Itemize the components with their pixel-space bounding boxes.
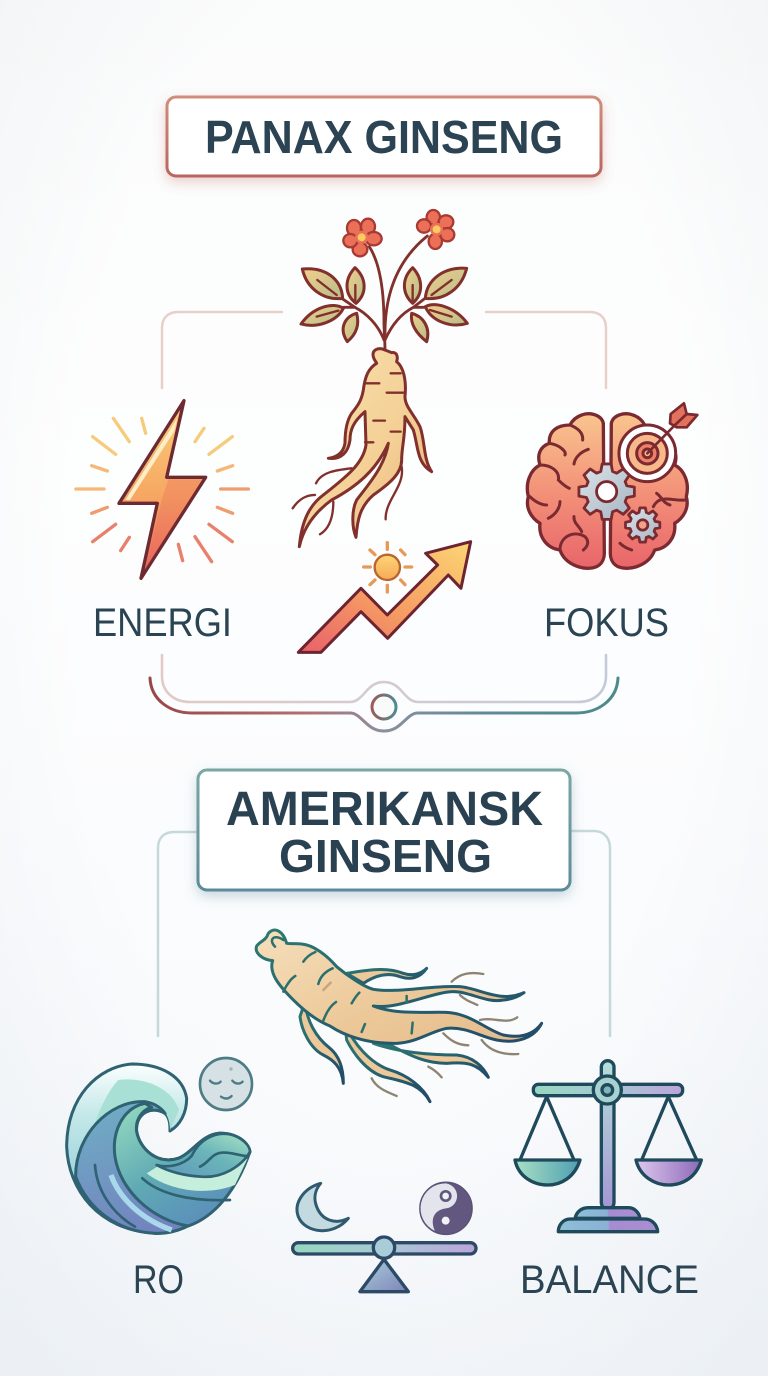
- label: BALANCE: BALANCE: [520, 1258, 699, 1302]
- crescent moon: [297, 1183, 348, 1231]
- bolt: [119, 401, 206, 578]
- body markings: [272, 937, 413, 1033]
- root markings: [365, 373, 403, 442]
- left pan: [515, 1160, 580, 1185]
- leaf veins: [317, 280, 452, 317]
- wave back band: [76, 1102, 250, 1233]
- right pan: [636, 1160, 701, 1185]
- beam: [533, 1084, 683, 1096]
- wave crest colour: [95, 1079, 179, 1130]
- icon: American ginseng root: [256, 930, 542, 1102]
- sun: [364, 543, 412, 592]
- connector lines: American top: [158, 831, 610, 1036]
- wave outline: [67, 1064, 250, 1233]
- root body: [299, 349, 432, 547]
- target: [619, 425, 676, 482]
- icon: wave with calm moon face: [67, 1058, 252, 1233]
- strings: [520, 1097, 697, 1160]
- icon: balance scales: [515, 1061, 701, 1232]
- label: RO: RO: [133, 1258, 184, 1302]
- hub: [593, 1076, 621, 1104]
- tails: [300, 968, 488, 1102]
- icon: rising arrow with sun: [298, 542, 471, 652]
- rootlets: [293, 467, 402, 534]
- right hemisphere: [610, 414, 687, 568]
- flower left: [343, 219, 382, 256]
- title: Panax Ginseng: [167, 97, 601, 176]
- body with long tails: [256, 930, 542, 1043]
- big gear: [579, 464, 634, 519]
- bolt shade: [145, 479, 202, 570]
- lower base: [558, 1219, 658, 1232]
- moon face: [200, 1058, 252, 1110]
- label: FOKUS: FOKUS: [544, 601, 669, 645]
- wave inner lines: [95, 1153, 248, 1227]
- wave pale stripe: [147, 1158, 248, 1191]
- thin rootlets: [372, 973, 518, 1096]
- plant stems: [342, 236, 427, 350]
- brain folds: [530, 425, 685, 550]
- title: Amerikansk Ginseng: GINSENG: [279, 830, 492, 882]
- yin-yang: [420, 1182, 472, 1234]
- wave tongue: [157, 1134, 250, 1177]
- left hemisphere: [527, 414, 604, 568]
- connector lines: Panax top: [162, 312, 606, 388]
- wave light stripe: [111, 1175, 172, 1230]
- rays: [76, 418, 248, 562]
- leaves: [301, 268, 467, 342]
- icon: brain with gears and target (focus): [527, 403, 697, 568]
- hub: [373, 1237, 395, 1258]
- post: [601, 1061, 614, 1209]
- arrow: [647, 403, 697, 453]
- upper base: [575, 1208, 640, 1218]
- fulcrum: [360, 1259, 408, 1292]
- bolt highlight: [125, 418, 177, 500]
- title: Amerikansk Ginseng: AMERIKANSK: [226, 783, 543, 836]
- title: Panax Ginseng: PANAX GINSENG: [205, 111, 563, 163]
- icon: lightning bolt (energy): [76, 401, 248, 578]
- label: ENERGI: ENERGI: [93, 601, 232, 645]
- arrow: [298, 542, 471, 652]
- icon: ginseng plant with root: [293, 210, 467, 547]
- connector bracket: Panax bottom: [150, 655, 618, 731]
- small gear: [625, 508, 660, 542]
- beam: [293, 1243, 476, 1254]
- wave green band: [114, 1103, 250, 1226]
- icon: seesaw with moon and yin-yang: [293, 1182, 476, 1292]
- title: Amerikansk Ginseng: [198, 770, 570, 890]
- flower right: [417, 210, 454, 249]
